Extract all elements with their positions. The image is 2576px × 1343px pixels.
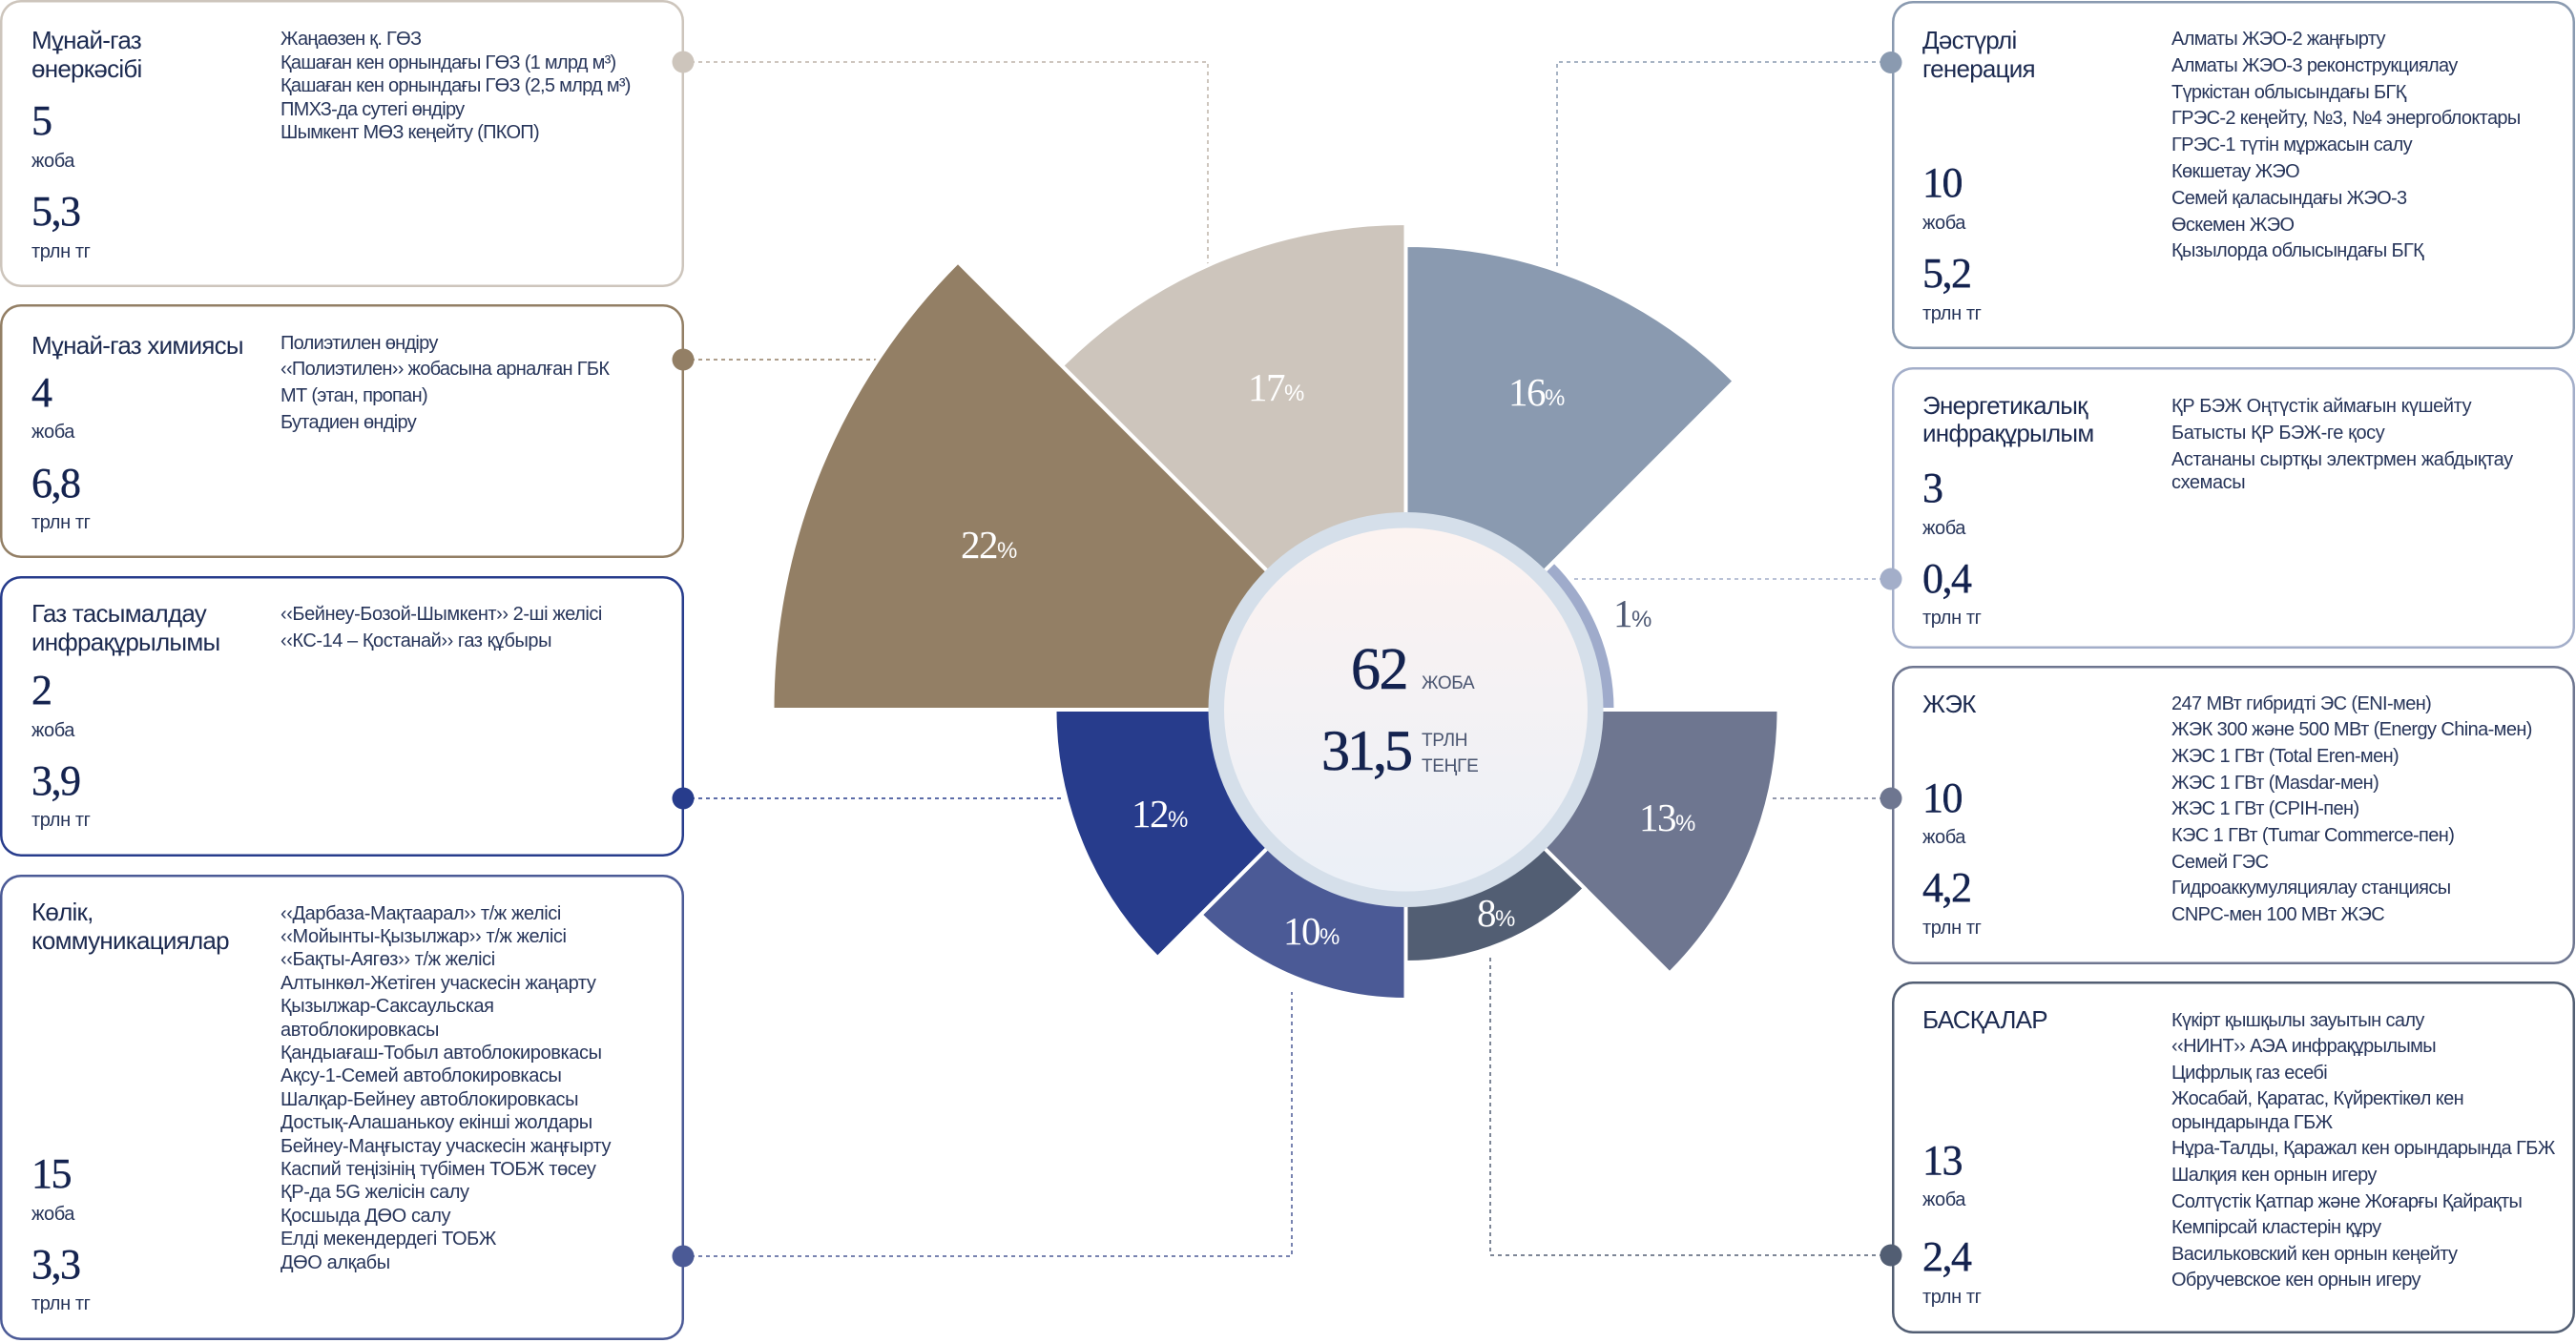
stat: trillion tenge: трлн тг [1922,303,1982,324]
project list: transport and communications: ҚР-да 5G желісін салу [280,1182,469,1203]
project list: petrochemicals: МТ (этан, пропан) [280,385,427,406]
heading: transport and communications: Көлік, [31,898,93,926]
sector: 13% renewable energy [1406,710,1778,973]
centre circle with totals [1208,512,1603,907]
project list: traditional generation: Қызылорда облысындағы БГҚ [2171,240,2423,261]
stat: projects: жоба [31,422,74,443]
project list: renewable energy: ЖЭС 1 ГВт (Masdar-мен) [2171,773,2379,794]
stat: trillion tenge: трлн тг [1922,608,1982,629]
project list: transport and communications: Қызылжар-Саксаульская [280,996,494,1017]
stat: projects: 4 [31,368,52,416]
stat: trillion tenge [1922,1233,1982,1307]
project list: transport and communications: Каспий теңізінің түбімен ТОБЖ төсеу [280,1159,595,1180]
project list: traditional generation: Алматы ЖЭО-3 реконструкциялау [2171,55,2458,76]
total projects [1351,637,1475,702]
heading: traditional generation: генерация [1922,53,2035,82]
project list: other projects: Шалқия кен орнын игеру [2171,1165,2377,1186]
project list: renewable energy: ЖЭС 1 ГВт (CPIH-пен) [2171,798,2359,819]
percent label: 1%: 1% [1613,591,1652,635]
connector: renewable energy [1770,788,1902,809]
total projects: 62 [1351,637,1407,702]
stat: projects: 3 [1922,465,1942,511]
stat: projects [31,368,74,443]
project list: other projects: Васильковский кен орнын кеңейту [2171,1244,2457,1265]
stat: projects [1922,1137,1965,1210]
stat: trillion tenge [31,460,91,533]
stat: trillion tenge: 5,3 [31,188,80,235]
project list: transport and communications: Бейнеу-Маңғыстау учаскесін жаңғырту [280,1136,611,1157]
heading: transport and communications: коммуникациялар [31,925,229,954]
project list: other projects: Обручевское кен орнын игеру [2171,1270,2420,1291]
heading: petrochemicals: Мұнай-газ химиясы [31,330,243,359]
project list: traditional generation: Семей қаласындағы ЖЭО-3 [2171,188,2407,209]
project list: petrochemicals: ‹‹Полиэтилен›› жобасына арналған ГБК [280,359,609,380]
sector: 16% traditional generation [1406,245,1735,710]
panel: gas transport infrastructure [0,576,684,857]
stat: trillion tenge [1922,555,1982,629]
heading: gas transport infrastructure: инфрақұрылымы [31,628,219,656]
connector: oil and gas industry [672,52,1208,267]
project list: transport and communications: Қосшыда ДӨО салу [280,1206,450,1227]
percent label: 10%: 10% [1283,909,1340,953]
project list: traditional generation [2171,29,2521,261]
stat: trillion tenge [31,1240,91,1314]
project list: other projects [2171,1009,2555,1291]
stat: projects: 10 [1922,775,1962,820]
stat: trillion tenge: трлн тг [1922,918,1982,939]
connector: petrochemicals [672,349,887,370]
heading: energy infrastructure: Энергетикалық [1922,391,2088,420]
project list: other projects: орындарында ГБЖ [2171,1112,2332,1133]
project list: traditional generation: Түркістан облысындағы БГҚ [2171,82,2406,103]
stat: trillion tenge: трлн тг [31,810,91,831]
percent label: 12%: 12% [1132,792,1188,836]
project list: oil and gas industry [280,29,631,143]
panel: traditional generation [1892,1,2575,349]
sector: 17% oil and gas industry [1062,223,1406,710]
sector: 8% other projects [1406,710,1585,962]
project list: renewable energy: ЖЭК 300 және 500 МВт (Energy China-мен) [2171,719,2532,740]
stat: projects [31,1150,74,1225]
project list: transport and communications: ‹‹Дарбаза-Мақтаарал›› т/ж желісі [280,902,561,923]
connector: gas transport [672,788,1073,809]
heading: renewable energy: ЖЭК [1922,690,1976,718]
stat: projects: 2 [31,667,52,713]
percent label: 13%: 13% [1639,795,1695,839]
stat: trillion tenge: 2,4 [1922,1233,1971,1280]
project list: transport and communications: ‹‹Бақты-Аягөз›› т/ж желісі [280,949,495,970]
project list: gas transport infrastructure [280,604,602,651]
heading: energy infrastructure [1922,391,2093,447]
connector: energy infrastructure [1565,568,1902,589]
stat: trillion tenge [1922,864,1982,939]
stat: trillion tenge: 5,2 [1922,250,1971,297]
project list: transport and communications: Елді мекендердегі ТОБЖ [280,1229,496,1250]
stat: projects [31,97,74,172]
project list: energy infrastructure [2171,395,2513,493]
project list: other projects: Цифрлық газ есебі [2171,1063,2327,1084]
stat: projects: жоба [1922,1189,1965,1210]
project list: other projects: Күкірт қышқылы зауытын салу [2171,1009,2424,1030]
percent label: 17%: 17% [1248,365,1304,409]
project list: renewable energy: 247 МВт гибридті ЭС (ENI-мен) [2171,692,2431,713]
project list: petrochemicals: Полиэтилен өндіру [280,332,438,353]
percent label: 22%: 22% [961,523,1017,567]
stat: projects: жоба [31,151,74,172]
stat: projects: 10 [1922,159,1962,206]
panel: transport and communications [0,875,684,1340]
total value: ТРЛН [1422,731,1467,751]
sector: 1% energy infrastructure [1406,561,1616,710]
project list: transport and communications: Ақсу-1-Семей автоблокировкасы [280,1065,562,1086]
connector: transport and communications [672,992,1292,1267]
stat: projects: 13 [1922,1137,1962,1183]
panel: petrochemicals [0,304,684,558]
heading: gas transport infrastructure: Газ тасымалдау [31,599,206,628]
project list: energy infrastructure: схемасы [2171,472,2245,493]
project list: oil and gas industry: Қашаған кен орнындағы ГӨЗ (2,5 млрд м³) [280,75,631,96]
sector: 22% petrochemicals [773,261,1406,710]
stat: projects [31,667,74,740]
stat: trillion tenge: трлн тг [31,1293,91,1314]
project list: transport and communications: ДӨО алқабы [280,1252,390,1273]
stat: trillion tenge [31,757,91,831]
stat: projects: жоба [31,719,74,740]
stat: trillion tenge: 4,2 [1922,864,1971,911]
stat: projects: 5 [31,97,52,144]
sector: 10% transport and communications [1200,710,1406,1000]
total value [1321,719,1478,782]
heading: traditional generation [1922,25,2035,82]
project list: oil and gas industry: Шымкент МӨЗ кеңейту (ПКОП) [280,122,539,143]
project list: other projects: Жосабай, Қаратас, Күйректікөл кен [2171,1088,2463,1109]
stat: projects: 15 [31,1150,71,1197]
percent label: 8%: 8% [1477,891,1515,935]
project list: gas transport infrastructure: ‹‹Бейнеу-Бозой-Шымкент›› 2-ші желісі [280,604,602,625]
stat: trillion tenge: трлн тг [31,512,91,533]
project list: other projects: Кемпірсай кластерін құру [2171,1217,2381,1238]
project list: renewable energy: ЖЭС 1 ГВт (Total Eren-мен) [2171,746,2399,767]
stat: projects: жоба [1922,212,1965,233]
project list: transport and communications: Шалқар-Бейнеу автоблокировкасы [280,1089,578,1110]
stat: trillion tenge: 0,4 [1922,555,1971,601]
heading: oil and gas industry [31,26,142,83]
project list: energy infrastructure: Астананы сыртқы электрмен жабдықтау [2171,448,2513,469]
connector: other projects [1490,957,1902,1267]
project list: gas transport infrastructure: ‹‹КС-14 – Қостанай›› газ құбыры [280,630,551,651]
project list: renewable energy [2171,692,2532,925]
stat: projects: жоба [31,1204,74,1225]
heading: oil and gas industry: өнеркәсібі [31,54,142,83]
stat: trillion tenge: 3,3 [31,1240,80,1288]
connector: traditional generation [1557,52,1902,277]
total projects: ЖОБА [1422,673,1475,693]
sector: 12% gas transport [1055,710,1406,958]
project list: traditional generation: Көкшетау ЖЭО [2171,161,2299,182]
project list: renewable energy: Семей ГЭС [2171,852,2268,873]
project list: other projects: Нұра-Талды, Қаражал кен орындарында ГБЖ [2171,1138,2555,1159]
heading: other projects: БАСҚАЛАР [1922,1005,2047,1034]
project list: traditional generation: Өскемен ЖЭО [2171,215,2294,236]
project list: oil and gas industry: ПМХЗ-да сутегі өндіру [280,99,464,120]
project list: oil and gas industry: Жаңаөзен қ. ГӨЗ [280,29,421,50]
stat: projects [1922,775,1965,848]
project list: petrochemicals: Бутадиен өндіру [280,412,416,433]
project list: transport and communications: ‹‹Мойынты-Қызылжар›› т/ж желісі [280,926,567,947]
project list: other projects: ‹‹НИНТ›› АЭА инфрақұрылымы [2171,1036,2436,1057]
heading: oil and gas industry: Мұнай-газ [31,26,141,54]
stat: trillion tenge: трлн тг [1922,1286,1982,1307]
project list: energy infrastructure: Батысты ҚР БЭЖ-ге қосу [2171,422,2384,443]
stat: trillion tenge [31,188,91,261]
stat: trillion tenge: 3,9 [31,757,80,803]
panel: oil and gas industry [0,0,684,287]
percent label: 16%: 16% [1508,370,1565,414]
project list: transport and communications: Алтынкөл-Жетіген учаскесін жаңарту [280,973,595,994]
project list: energy infrastructure: ҚР БЭЖ Оңтүстік аймағын күшейту [2171,395,2471,416]
panel: renewable energy [1892,666,2575,963]
project list: renewable energy: КЭС 1 ГВт (Tumar Commerce-пен) [2171,825,2454,846]
stat: projects: жоба [1922,517,1965,538]
project list: transport and communications: Достық-Алашанькоу екінші жолдары [280,1112,592,1133]
heading: transport and communications [31,898,229,954]
stat: trillion tenge: 6,8 [31,460,80,506]
project list: transport and communications: автоблокировкасы [280,1020,439,1041]
panel: energy infrastructure [1892,367,2575,649]
stat: trillion tenge [1922,250,1982,324]
stat: projects [1922,159,1965,233]
project list: traditional generation: ГРЭС-2 кеңейту, №3, №4 энергоблоктары [2171,108,2521,129]
stat: trillion tenge: трлн тг [31,240,91,261]
stat: projects [1922,465,1965,538]
stat: projects: жоба [1922,827,1965,848]
project list: traditional generation: Алматы ЖЭО-2 жаңғырту [2171,29,2385,50]
panel: other projects [1892,981,2575,1333]
heading: gas transport infrastructure [31,599,219,656]
project list: oil and gas industry: Қашаған кен орнындағы ГӨЗ (1 млрд м³) [280,52,616,72]
project list: transport and communications: Қандыағаш-Тобыл автоблокировкасы [280,1043,602,1064]
total value: ТЕҢГЕ [1422,756,1478,776]
heading: traditional generation: Дәстүрлі [1922,25,2017,53]
project list: renewable energy: CNPC-мен 100 МВт ЖЭС [2171,904,2384,925]
heading: energy infrastructure: инфрақұрылым [1922,419,2093,447]
project list: other projects: Солтүстік Қатпар және Жоғарғы Қайрақты [2171,1191,2522,1212]
project list: petrochemicals [280,332,610,433]
project list: transport and communications [280,902,611,1273]
project list: traditional generation: ГРЭС-1 түтін мұржасын салу [2171,134,2412,155]
total value: 31,5 [1321,719,1411,782]
project list: renewable energy: Гидроаккумуляциялау станциясы [2171,878,2451,899]
